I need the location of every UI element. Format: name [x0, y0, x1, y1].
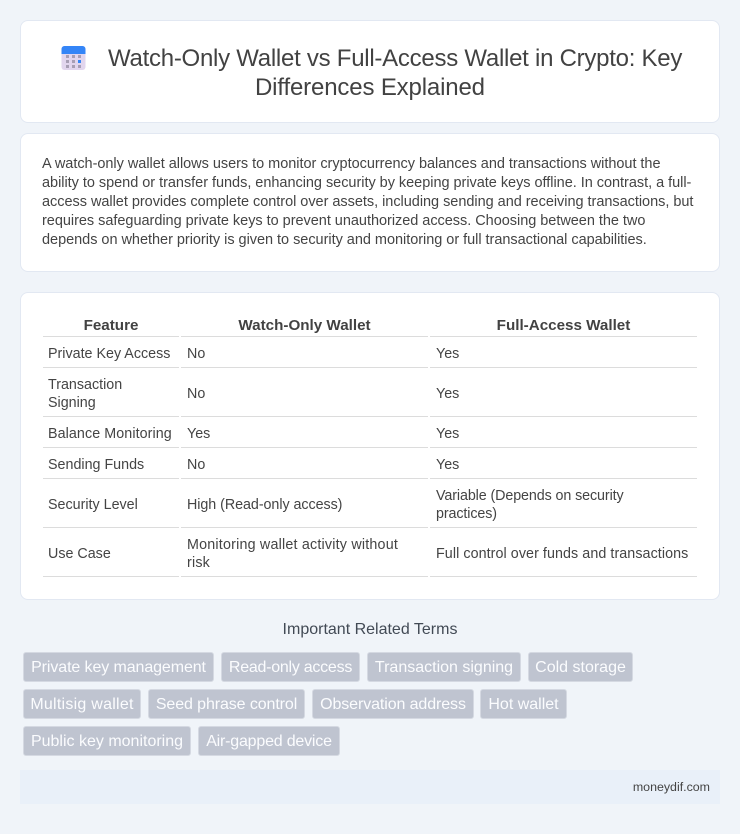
tag [23, 652, 214, 682]
tag [480, 689, 567, 719]
summary text: depends on whether priority is given to security and monitoring or full transactional capabilities. [42, 232, 647, 248]
table header: Full-Access Wallet [497, 317, 630, 334]
summary text: ability to spend or transfer funds, enhancing security by keeping private keys offline. In contrast, a full- [42, 175, 691, 191]
tag: Seed phrase control [156, 696, 297, 713]
row: private key access: Private Key Access [48, 346, 170, 362]
row: balance monitoring: Yes [187, 426, 210, 442]
tag: Transaction signing [375, 659, 513, 676]
tag: Observation address [320, 696, 466, 713]
row: private key access: Yes [436, 346, 459, 362]
row: transaction signing: No [187, 386, 205, 402]
tag: Public key monitoring [31, 733, 183, 750]
row: private key access [48, 346, 459, 362]
footer bar [20, 770, 720, 804]
table header: Watch-Only Wallet [238, 317, 371, 334]
tag [367, 652, 521, 682]
row: sending funds: Yes [436, 457, 459, 473]
tag: Private key management [31, 659, 206, 676]
panel: title card [20, 20, 720, 123]
row: balance monitoring: Balance Monitoring [48, 426, 172, 442]
row: use case: Use Case [48, 546, 111, 562]
tag [148, 689, 305, 719]
row: security level [48, 488, 624, 522]
row: balance monitoring [48, 426, 459, 442]
row: security level: Security Level [48, 497, 138, 513]
related term tags [23, 652, 633, 756]
row: transaction signing [48, 377, 459, 411]
row: sending funds: No [187, 457, 205, 473]
summary text [42, 156, 694, 248]
summary text: requires safeguarding private keys to prevent unauthorized access. Choosing between the two [42, 213, 645, 229]
row: sending funds: Sending Funds [48, 457, 144, 473]
comparison table [43, 317, 697, 577]
row: security level: High (Read-only access) [187, 497, 342, 513]
heading: related terms: Important Related Terms [283, 621, 457, 638]
tag: Multisig wallet [30, 696, 134, 713]
row: use case: risk [187, 555, 210, 571]
tag: Read-only access [229, 659, 352, 676]
row: security level: Variable (Depends on security [436, 488, 624, 504]
tag: Air-gapped device [206, 733, 332, 750]
row: transaction signing: Transaction [48, 377, 122, 393]
tag: Cold storage [535, 659, 626, 676]
tag [312, 689, 474, 719]
tag [23, 689, 141, 719]
tag [528, 652, 633, 682]
table header [84, 317, 630, 334]
row: transaction signing: Signing [48, 395, 96, 411]
panel: summary [20, 133, 720, 272]
icon: calendar grid [62, 46, 86, 70]
title: Differences Explained [255, 74, 485, 101]
summary text: A watch-only wallet allows users to monitor cryptocurrency balances and transactions without the [42, 156, 661, 172]
title: Watch-Only Wallet vs Full-Access Wallet in Crypto: Key [108, 45, 682, 72]
title [108, 45, 682, 101]
tag [23, 726, 191, 756]
row: use case: Monitoring wallet activity without [187, 537, 398, 553]
row: transaction signing: Yes [436, 386, 459, 402]
row: use case [48, 537, 688, 571]
row: private key access: No [187, 346, 205, 362]
row: balance monitoring: Yes [436, 426, 459, 442]
row: security level: practices) [436, 506, 497, 522]
summary text: access wallet provides complete control over assets, including sending and receiving transactions, but [42, 194, 693, 210]
panel: comparison table [20, 292, 720, 600]
tag [221, 652, 360, 682]
footer source text: moneydif.com [633, 780, 710, 794]
row: sending funds [48, 457, 459, 473]
row: use case: Full control over funds and transactions [436, 546, 688, 562]
tag [198, 726, 340, 756]
table header: Feature [84, 317, 138, 334]
tag: Hot wallet [488, 696, 559, 713]
